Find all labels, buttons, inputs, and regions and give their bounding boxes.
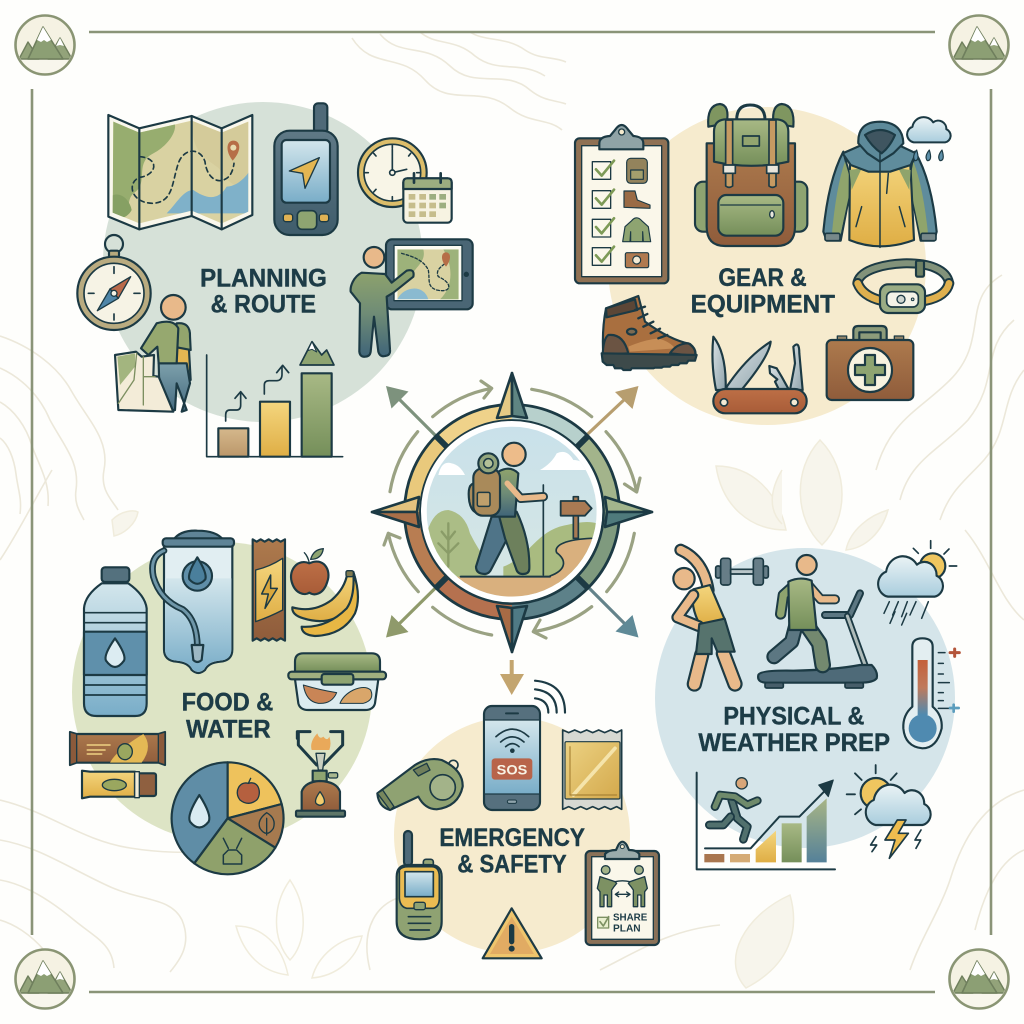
icon: hiker holding paper map	[115, 295, 191, 412]
icon: thermometer	[903, 638, 959, 748]
icon: backpack	[695, 104, 807, 246]
icon: energy bar	[253, 539, 285, 641]
icon: sun storm cloud	[847, 765, 931, 858]
icon: rain jacket	[823, 122, 937, 247]
icon: mountain medallion top right	[949, 16, 1009, 75]
icon: stretching person	[673, 550, 735, 684]
icon: packing checklist clipboard	[575, 125, 668, 283]
background leaves	[112, 440, 888, 988]
panel: planning and route	[77, 102, 473, 457]
icon: clock	[358, 138, 427, 207]
icon: handheld GPS device	[274, 103, 338, 235]
panel: physical and weather prep	[655, 541, 959, 869]
icon: warning triangle	[483, 908, 542, 958]
icon: mountain medallion bottom right	[949, 950, 1009, 1009]
icon: phone with SOS	[484, 706, 540, 810]
icon: mountain medallion top left	[15, 16, 75, 75]
icon: pocket compass	[77, 235, 151, 330]
arrow: to emergency	[500, 660, 524, 695]
arrow: to physical prep	[583, 582, 638, 638]
heading: gear and equipment: EQUIPMENT	[691, 291, 835, 319]
icon: rain cloud	[907, 117, 951, 161]
heading: food and water: FOOD &	[182, 689, 273, 717]
chart: fitness progress	[697, 773, 835, 869]
heading: physical and weather prep: WEATHER PREP	[698, 729, 890, 757]
heading: gear and equipment	[691, 264, 835, 319]
heading: planning and route: PLANNING	[200, 265, 327, 293]
icon: water bottle	[84, 567, 147, 716]
hiker scene	[421, 421, 602, 602]
heading: planning and route	[200, 265, 327, 319]
icon: emergency blanket pouch	[563, 730, 622, 809]
icon: lunch box	[288, 653, 386, 710]
compass ring segments	[404, 404, 620, 620]
heading: emergency and safety	[439, 824, 585, 878]
curved cycle arrows	[384, 381, 640, 638]
icon: snack bars	[70, 732, 165, 798]
icon: tablet with route map	[386, 239, 473, 309]
arrow: to planning	[386, 386, 437, 437]
icon: sun cloud and rain	[878, 541, 957, 625]
icon: camping stove	[296, 732, 345, 817]
compass star points	[372, 373, 652, 652]
icon: calendar	[403, 173, 452, 223]
heading: emergency and safety: & SAFETY	[457, 850, 567, 878]
icon: apple and bananas	[291, 549, 358, 636]
icon: hiking boot	[602, 296, 697, 370]
icon: walkie-talkie radio	[397, 831, 442, 939]
icon: share plan clipboard: PLAN	[613, 924, 641, 935]
heading: physical and weather prep	[698, 702, 890, 757]
chart: nutrition pie	[172, 762, 284, 874]
heading: food and water: WATER	[186, 716, 271, 744]
icon: mountain medallion bottom left	[15, 950, 75, 1009]
icon: folded map	[108, 115, 253, 229]
panel: emergency and safety	[377, 681, 659, 958]
heading: emergency and safety: EMERGENCY	[439, 824, 585, 852]
icon: share plan clipboard: SHARE	[613, 913, 648, 924]
icon: signal waves	[535, 681, 565, 713]
heading: physical and weather prep: PHYSICAL &	[723, 702, 864, 730]
icon: phone with SOS: SOS	[497, 761, 527, 777]
arrow: to food	[386, 587, 437, 638]
heading: food and water	[182, 689, 273, 744]
heading: planning and route: & ROUTE	[211, 291, 316, 319]
icon: whistle	[377, 759, 463, 810]
icon: person on treadmill	[758, 555, 877, 688]
chart: rising bars with mountain goal	[207, 342, 343, 457]
panel: gear and equipment	[575, 104, 951, 425]
panel: food and water	[70, 531, 386, 874]
icon: multi-tool pocket knife	[712, 337, 807, 413]
icon: share plan clipboard	[586, 842, 659, 945]
arrow: to gear	[587, 386, 638, 435]
icon: person pointing at tablet	[351, 247, 414, 357]
icon: headlamp	[858, 261, 949, 313]
heading: gear and equipment: GEAR &	[718, 264, 807, 292]
icon: first aid kit	[827, 326, 913, 400]
icon: dumbbell	[716, 558, 768, 585]
central compass hiker emblem	[372, 373, 652, 695]
icon: hydration bladder	[152, 531, 234, 673]
